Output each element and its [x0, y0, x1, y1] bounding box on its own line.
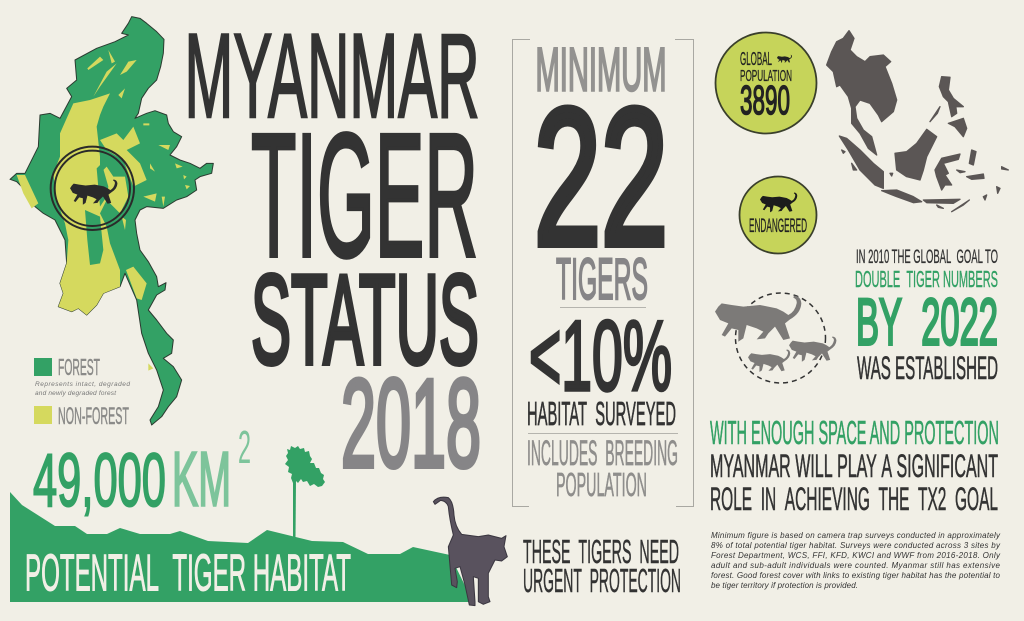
- text: TIGERS: [556, 247, 648, 312]
- stat: includes breeding population: [527, 434, 678, 503]
- footnote: be tiger territory if protection is provided.: [711, 581, 858, 590]
- footnote: 8% of total potential tiger habitat. Surveys were conducted across 3 sites by: [711, 541, 1001, 550]
- text: global goal: [855, 247, 998, 386]
- footnote: [711, 531, 1001, 590]
- badge: endangered: [740, 176, 816, 254]
- habitat area figure: 49,000: [33, 438, 166, 522]
- icon: map target circle: [51, 147, 134, 230]
- badge: endangered: ENDANGERED: [749, 216, 807, 237]
- habitat area figure: 2: [238, 421, 251, 473]
- text: FOREST: [58, 354, 100, 380]
- icon: tiger from behind: [433, 497, 507, 606]
- footnote: adult and sub-adult individuals were counted. Myanmar still has extensive: [711, 561, 1001, 570]
- legend: forest note: and newly degraded forest: [35, 390, 117, 397]
- badge: global population: GLOBAL: [740, 49, 772, 69]
- legend: non-forest swatch: [34, 406, 52, 424]
- icon: tiger on map: [70, 179, 117, 205]
- map: South East Asia: [827, 31, 1008, 212]
- text: role in TX2 goal: [710, 414, 999, 517]
- footnote: forest. Good forest cover with links to existing tiger habitat has the potential to: [711, 571, 1001, 580]
- legend: forest swatch: [34, 358, 52, 376]
- stat: 22: 22: [534, 69, 668, 286]
- text: MINIMUM: [536, 36, 666, 104]
- badge: global population: [716, 32, 816, 134]
- footnote: Forest Department, WCS, FFI, KFD, KWCI and WWF from 2016-2018. Only: [711, 551, 1001, 560]
- text: HABITAT SURVEYED: [527, 395, 676, 432]
- map: Myanmar forest cover: [10, 17, 213, 425]
- panel: bracket frame: [512, 40, 694, 506]
- badge: global population: POPULATION: [740, 68, 792, 85]
- text: POTENTIAL TIGER HABITAT: [25, 544, 351, 602]
- legend: forest note: [35, 381, 130, 397]
- urgent protection text: [523, 533, 681, 599]
- icon: tigers in dashed circle: [715, 293, 836, 383]
- title: [184, 9, 480, 390]
- text: THESE TIGERS NEED: [523, 533, 679, 570]
- text: NON-FOREST: [58, 403, 129, 430]
- text: STATUS: [251, 248, 479, 390]
- text: INCLUDES BREEDING: [527, 434, 678, 473]
- text: MYANMAR: [184, 9, 480, 143]
- text: TIGER: [251, 98, 478, 294]
- badge: global population: 3890: [740, 77, 790, 123]
- habitat area figure: KM: [172, 437, 231, 523]
- hill band: potential tiger habitat: [10, 492, 473, 602]
- legend: forest note: Represents intact, degraded: [35, 381, 130, 388]
- stat: under 10 percent: <10%: [529, 300, 672, 411]
- stat: includes breeding population: POPULATION: [556, 466, 647, 503]
- text: URGENT PROTECTION: [523, 562, 681, 599]
- title year: 2018: [341, 354, 481, 494]
- footnote: Minimum figure is based on camera trap surveys conducted in approximately: [711, 531, 1001, 540]
- icon: tree: [285, 446, 325, 538]
